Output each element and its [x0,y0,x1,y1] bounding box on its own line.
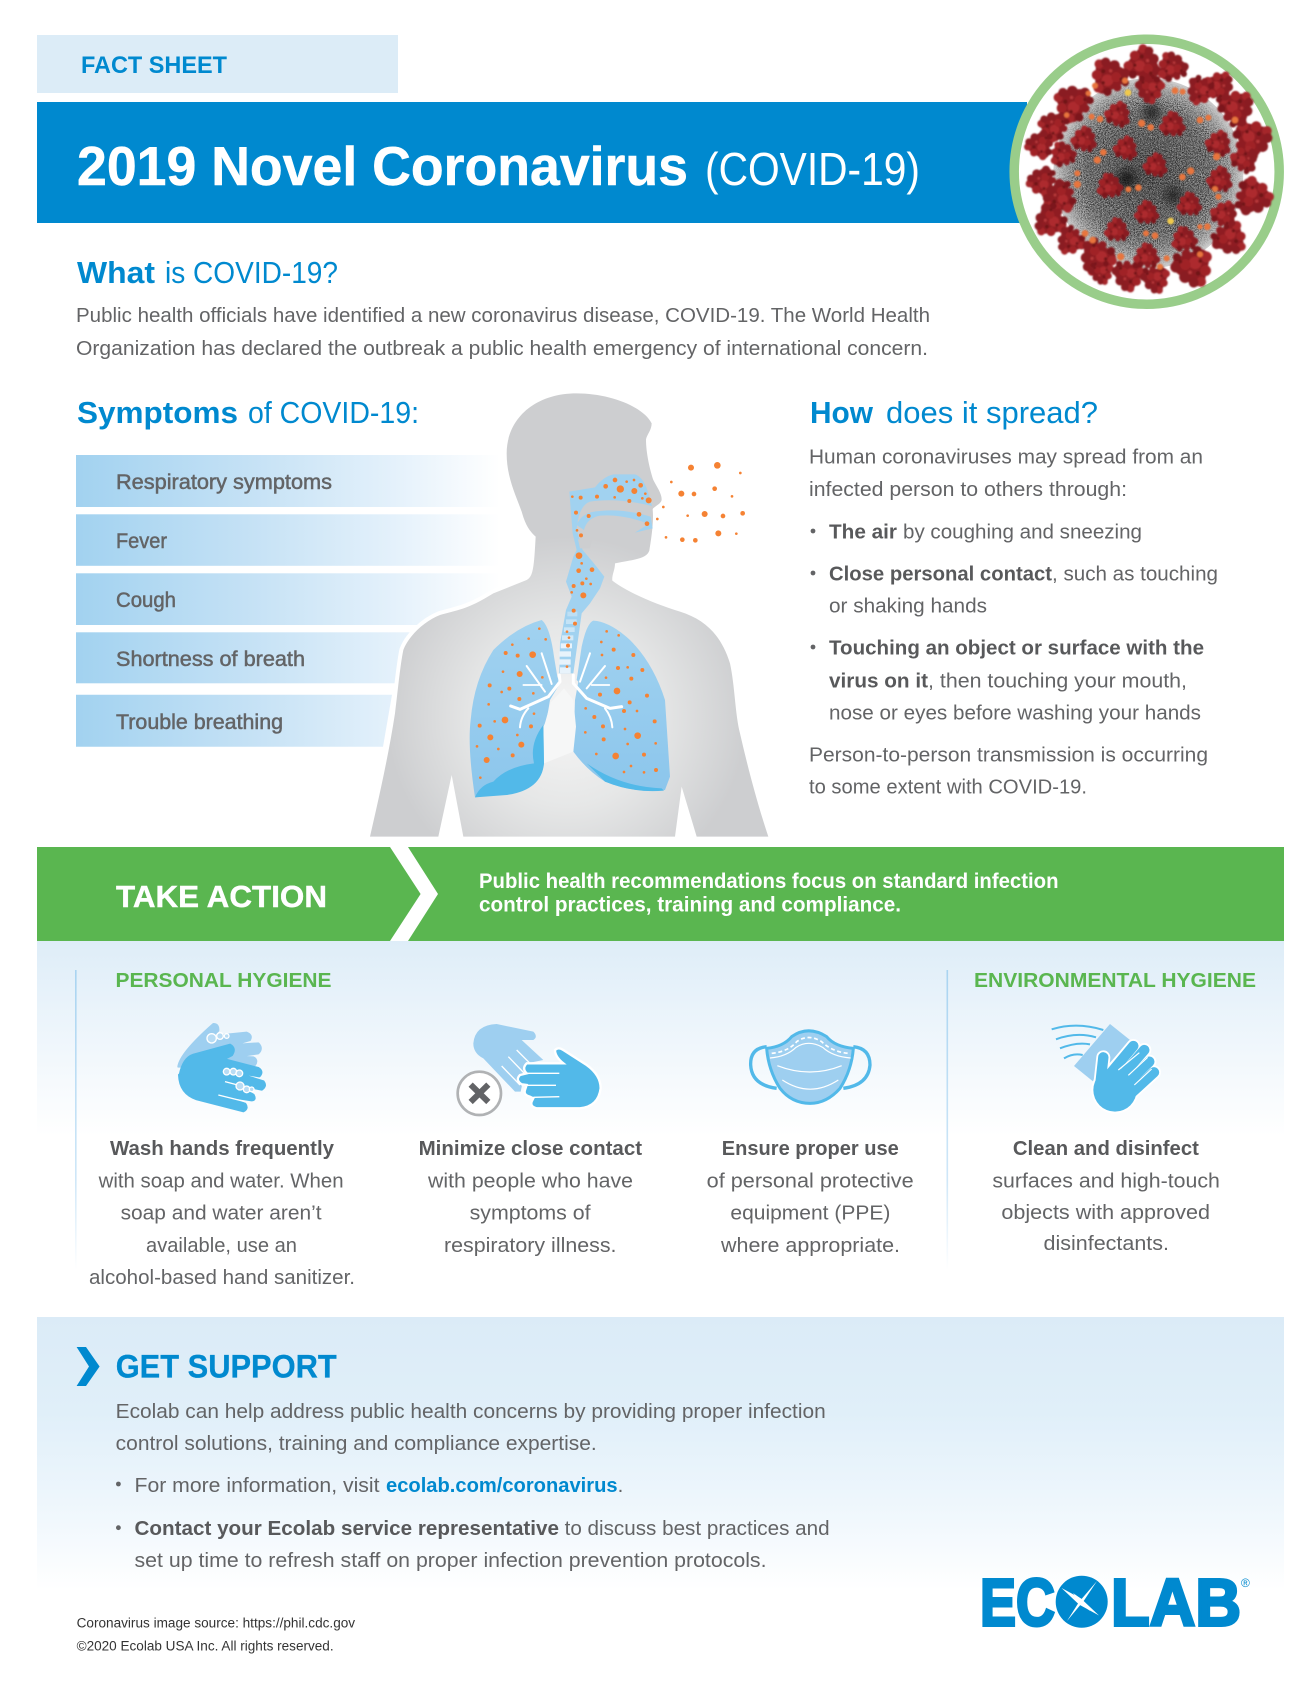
footnotes: Coronavirus image source: https://phil.cdc.gov [77,1616,355,1631]
symptoms heading: Symptoms [77,395,238,430]
title banner: 2019 Novel Coronavirus [77,136,688,197]
logo: Ecolab [980,1566,1250,1640]
symptoms list: Shortness of breath [116,648,305,671]
section: how does it spread: by coughing and sneezing [903,520,1142,544]
bullet: more information: For more information, visit [134,1474,380,1497]
heading: personal hygiene: PERSONAL HYGIENE [116,970,332,992]
fact sheet label: FACT SHEET [81,52,227,79]
text: wash hands: alcohol-based hand sanitizer. [89,1266,355,1289]
text: ensure proper use: Ensure proper use [722,1137,899,1160]
section: what is COVID-19: Organization has declared the outbreak a public health emergency of international concern. [76,337,928,360]
section: how does it spread: Close personal contact [829,562,1052,586]
symptoms list [76,455,500,747]
bullet: more information [116,1474,623,1497]
droplets and infected particles [476,462,745,779]
section: how does it spread: does it spread? [886,395,1098,430]
symptoms list: Respiratory symptoms [116,471,332,494]
bullet: contact representative: to discuss best practices and [565,1517,830,1540]
text: wash hands: Wash hands frequently [110,1137,335,1160]
footnotes [77,1616,355,1654]
section: how does it spread: Person-to-person transmission is occurring [809,744,1208,766]
text: minimize close contact [419,1137,642,1257]
text: clean and disinfect: disinfectants. [1044,1232,1169,1255]
text: ensure proper use: of personal protective [707,1170,914,1193]
bullet: more information: . [618,1474,623,1497]
text: support description: Ecolab can help address public health concerns by providing proper infection [116,1400,826,1423]
airway [559,474,653,673]
bullet: more information: ecolab.com/coronavirus [386,1474,618,1497]
text: minimize close contact: symptoms of [470,1202,591,1224]
section: how does it spread: , such as touching [1052,562,1218,586]
symptoms heading [77,395,419,430]
logo: Ecolab: ® [1241,1576,1250,1590]
coronavirus image [1014,39,1279,304]
panel: get support [37,1317,1284,1590]
text: minimize close contact: with people who have [427,1170,633,1193]
right lung [573,621,670,791]
logo: Ecolab: LAB [1111,1566,1241,1640]
icon: chevron [77,1347,100,1386]
bullet: contact representative: Contact your Ecolab service representative [134,1517,559,1540]
text: ensure proper use [707,1137,914,1257]
icon: hands with no-contact mark [458,1024,601,1115]
icon: cleaning hand and wipe [1052,1024,1154,1114]
symptoms list: Cough [116,589,176,612]
text: ensure proper use: where appropriate. [720,1234,900,1257]
text: wash hands: soap and water aren’t [121,1202,322,1224]
icon: washing hands [178,1024,265,1111]
icon: face mask [751,1031,870,1103]
section: how does it spread: to some extent with COVID-19. [809,776,1087,798]
left lung [470,620,560,797]
section: what is COVID-19: Public health officials have identified a new coronavirus disease, COVID-19. The World Health [76,304,930,327]
section: how does it spread: , then touching your mouth, [928,670,1187,692]
section: how does it spread: virus on it [829,670,928,692]
text: wash hands [89,1137,355,1289]
text: minimize close contact: respiratory illness. [444,1234,616,1257]
text: ensure proper use: equipment (PPE) [730,1202,890,1224]
section: how does it spread [809,395,1218,798]
section: how does it spread: The air [829,520,897,544]
text: minimize close contact: Minimize close contact [419,1137,642,1160]
take action banner: TAKE ACTION [116,879,327,914]
text: wash hands: available, use an [146,1234,297,1257]
bronchi [511,653,622,727]
title banner: (COVID-19) [705,143,920,195]
take action banner: Public health recommendations focus on standard infection [479,870,1058,893]
logo: Ecolab: O [1055,1566,1105,1640]
heading: environmental hygiene: ENVIRONMENTAL HYGIENE [974,970,1256,992]
take action banner: control practices, training and compliance. [479,894,901,916]
text: clean and disinfect: Clean and disinfect [1013,1137,1199,1160]
section: what is COVID-19: is COVID-19? [165,255,338,290]
title banner [37,102,1027,223]
bullet: contact representative [116,1517,830,1572]
section: how does it spread: or shaking hands [829,594,987,618]
heading: get support: GET SUPPORT [116,1349,337,1385]
section: how does it spread: How [810,395,874,430]
take action banner [37,847,1284,941]
text: wash hands: with soap and water. When [98,1170,344,1193]
footnotes: ©2020 Ecolab USA Inc. All rights reserved. [77,1639,334,1654]
symptoms list: Fever [116,530,167,553]
section: what is COVID-19 [76,255,930,360]
text: clean and disinfect [992,1137,1220,1255]
section: how does it spread: Human coronaviruses may spread from an [809,446,1203,468]
section: how does it spread: infected person to others through: [809,478,1127,501]
panel: take action recommendations [37,941,1284,1289]
section: how does it spread: nose or eyes before washing your hands [829,702,1201,724]
bullet: contact representative: set up time to refresh staff on proper infection prevention protocols. [134,1549,766,1572]
section: what is COVID-19: What [77,255,155,290]
fact sheet label [37,35,398,93]
symptoms heading: of COVID-19: [248,395,419,430]
symptoms list: Trouble breathing [116,711,283,734]
text: support description: control solutions, training and compliance expertise. [116,1432,597,1455]
logo: Ecolab: EC [980,1566,1055,1640]
text: clean and disinfect: objects with approved [1001,1201,1210,1224]
illustration: person with infected airway and lungs [370,393,768,837]
text: support description [116,1400,826,1455]
section: how does it spread: Touching an object or surface with the [829,636,1204,660]
text: clean and disinfect: surfaces and high-touch [992,1170,1220,1193]
